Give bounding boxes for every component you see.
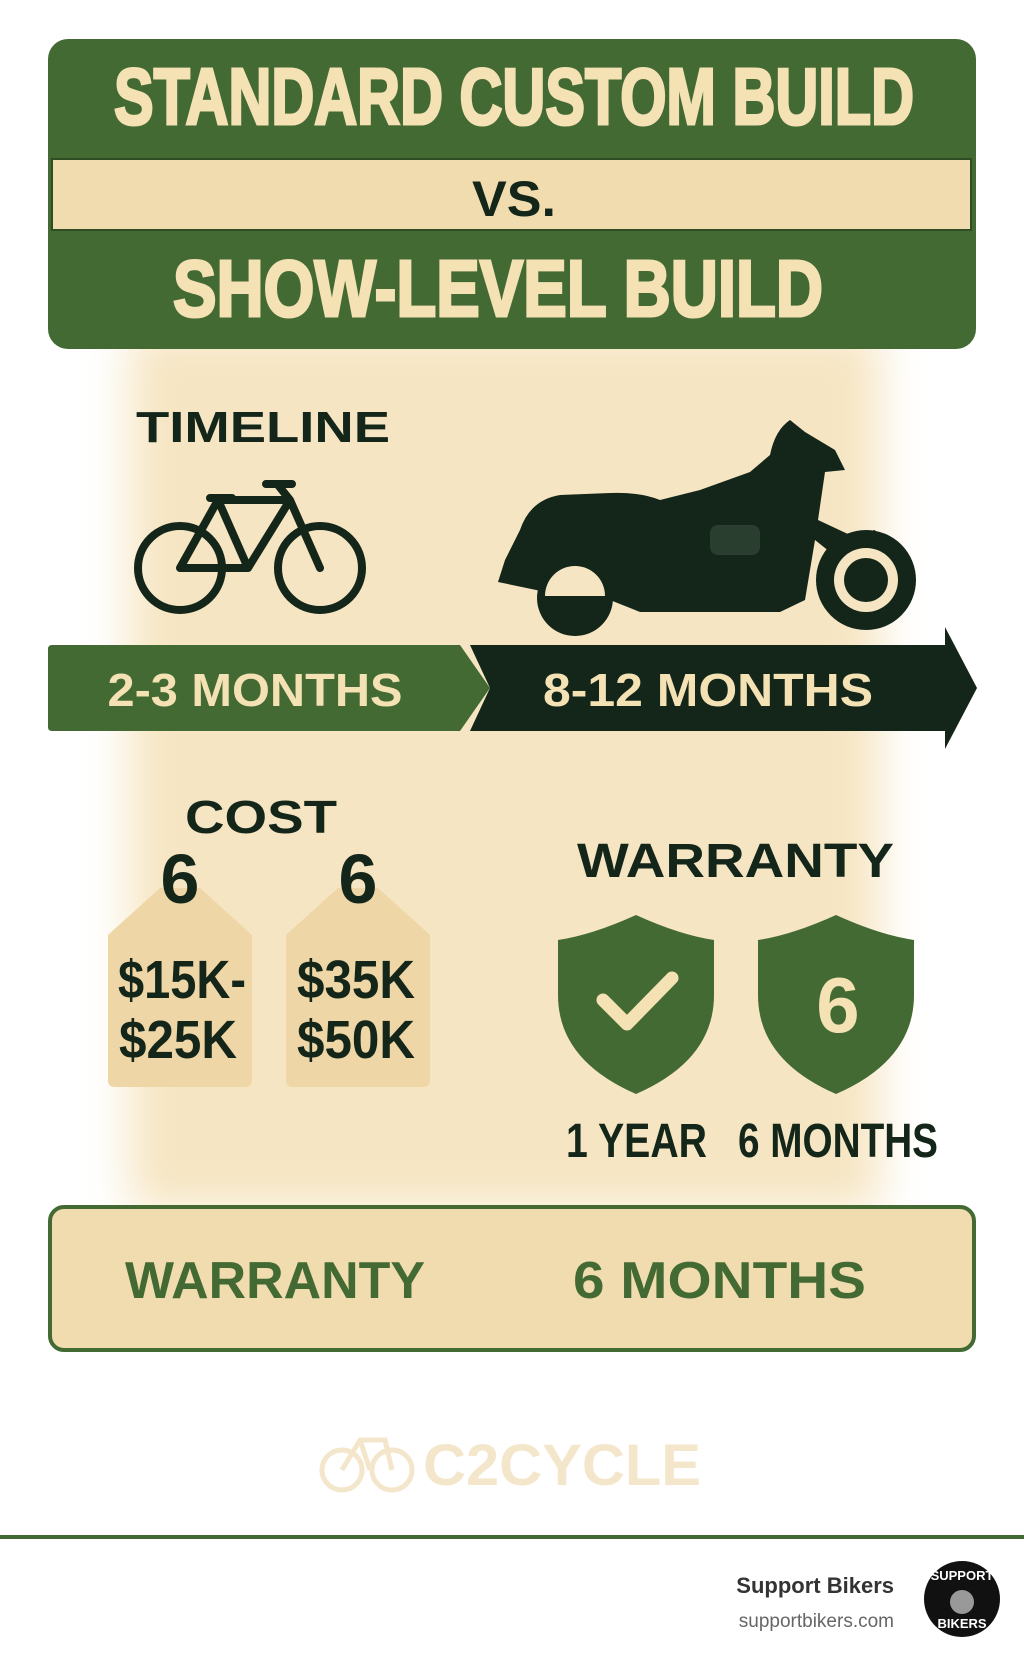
- watermark logo: C2CYCLE: [423, 1433, 701, 1498]
- icon: shield check: [558, 915, 714, 1094]
- footer brand text: [736, 1573, 894, 1632]
- label: 1 year: 1 YEAR: [566, 1115, 707, 1168]
- summary box: 6 MONTHS: [573, 1252, 866, 1310]
- price tag 1: [108, 840, 252, 1087]
- footer brand text: Support Bikers: [736, 1573, 894, 1598]
- icon: motorcycle: [498, 420, 916, 636]
- cost heading: COST: [185, 791, 337, 843]
- label: 6 months: 6 MONTHS: [738, 1115, 938, 1168]
- vs: VS.: [472, 171, 556, 227]
- price tag 1: $25K: [119, 1010, 237, 1070]
- warranty heading: WARRANTY: [577, 835, 894, 888]
- timeline heading: TIMELINE: [136, 403, 390, 452]
- price tag 2: $50K: [297, 1010, 415, 1070]
- timeline arrow bar: [48, 627, 977, 749]
- title line 2: SHOW-LEVEL BUILD: [173, 244, 823, 333]
- footer logo badge: SUPPORT: [931, 1568, 993, 1583]
- icon: shield six: [758, 915, 914, 1094]
- price tag 1: $15K-: [118, 950, 246, 1010]
- price tag 2: $35K: [297, 950, 415, 1010]
- footer brand text: supportbikers.com: [739, 1611, 894, 1632]
- price tag 1: 6: [161, 840, 199, 918]
- cream background glow: [130, 330, 880, 1210]
- icon: bicycle: [138, 484, 362, 610]
- footer logo badge: [924, 1561, 1000, 1637]
- header panel: [48, 39, 976, 349]
- summary box: WARRANTY: [125, 1252, 425, 1310]
- price tag 2: 6: [339, 840, 377, 918]
- price tag 2: [286, 840, 430, 1087]
- footer logo badge: BIKERS: [937, 1616, 987, 1631]
- summary box: [50, 1207, 974, 1350]
- icon: shield six: 6: [816, 961, 860, 1049]
- label: 2-3 months: 2-3 MONTHS: [108, 664, 402, 716]
- label: 8-12 months: 8-12 MONTHS: [543, 664, 873, 716]
